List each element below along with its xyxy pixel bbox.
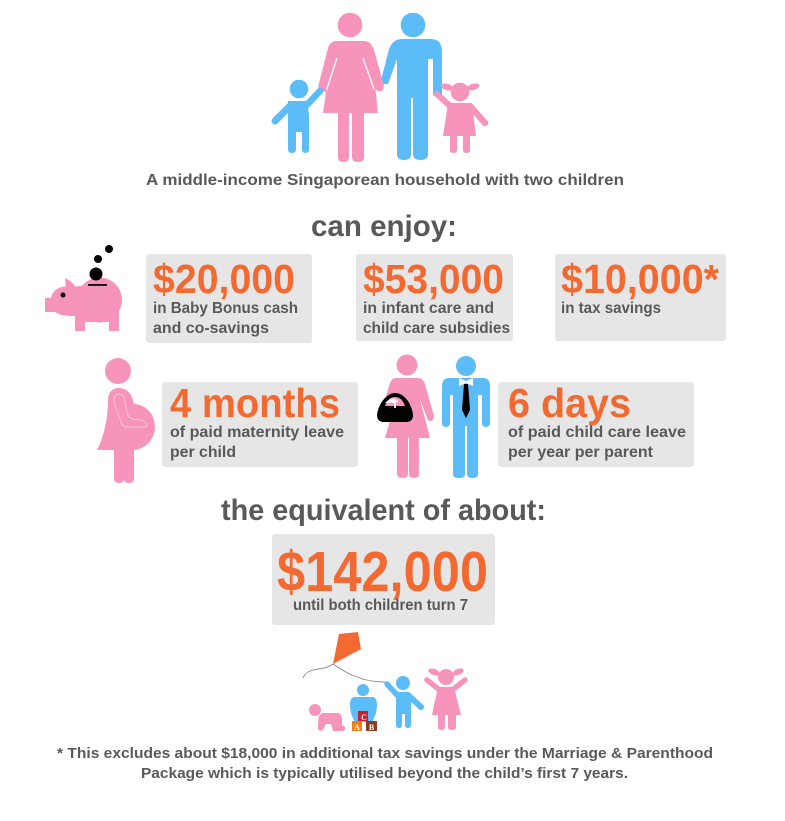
footnote — [57, 745, 713, 782]
icon: pregnant woman — [97, 358, 155, 483]
working mother — [377, 354, 434, 478]
panel: tax savings — [555, 254, 726, 341]
footnote: Package which is typically utilised beyond the child’s first 7 years. — [141, 765, 628, 782]
kite — [303, 632, 385, 682]
panel: total value — [272, 534, 495, 625]
panel: infant care subsidies: in infant care and — [363, 300, 494, 317]
subtitle: A middle-income Singaporean household with two children — [146, 172, 624, 189]
panel: baby bonus — [146, 254, 312, 343]
panel: tax savings: in tax savings — [561, 300, 661, 317]
panel: tax savings: $10,000* — [561, 256, 719, 302]
icon: children playing with kite — [303, 632, 465, 732]
footnote: * This excludes about $18,000 in additional tax savings under the Marriage & Parenthood — [57, 745, 713, 762]
heading: the equivalent of about: the equivalent of about: — [221, 494, 546, 527]
panel: maternity leave: of paid maternity leave — [170, 424, 344, 441]
sitting child with blocks: C — [361, 713, 367, 722]
panel: child care leave — [498, 380, 694, 467]
boy with kite string — [387, 676, 421, 728]
baby — [309, 704, 345, 731]
panel: baby bonus: and co-savings — [153, 320, 269, 337]
icon: piggy bank — [45, 245, 122, 331]
working father — [442, 356, 490, 478]
panel: baby bonus: in Baby Bonus cash — [153, 300, 298, 317]
icon: family of four — [275, 13, 485, 162]
icon: working parents — [377, 354, 490, 478]
heading: can enjoy: can enjoy: — [311, 210, 457, 243]
panel: total value: until both children turn 7 — [293, 597, 468, 614]
panel: maternity leave: 4 months — [170, 380, 340, 426]
panel: child care leave: 6 days — [508, 380, 631, 426]
panel: infant care subsidies — [356, 254, 513, 341]
panel: child care leave: per year per parent — [508, 444, 654, 461]
panel: maternity leave: per child — [170, 444, 236, 461]
panel: child care leave: of paid child care leave — [508, 424, 686, 441]
panel: total value: $142,000 — [277, 540, 488, 604]
girl with arms raised — [427, 667, 465, 730]
sitting child with blocks: A — [354, 723, 360, 732]
panel: baby bonus: $20,000 — [153, 256, 295, 302]
girl — [437, 82, 485, 153]
father — [380, 13, 442, 160]
sitting child with blocks: B — [369, 723, 375, 732]
panel: maternity leave — [162, 380, 358, 467]
sitting child with blocks — [350, 684, 377, 732]
boy — [275, 80, 320, 153]
panel: infant care subsidies: child care subsidies — [363, 320, 510, 337]
panel: infant care subsidies: $53,000 — [363, 256, 504, 302]
mother — [318, 13, 384, 162]
